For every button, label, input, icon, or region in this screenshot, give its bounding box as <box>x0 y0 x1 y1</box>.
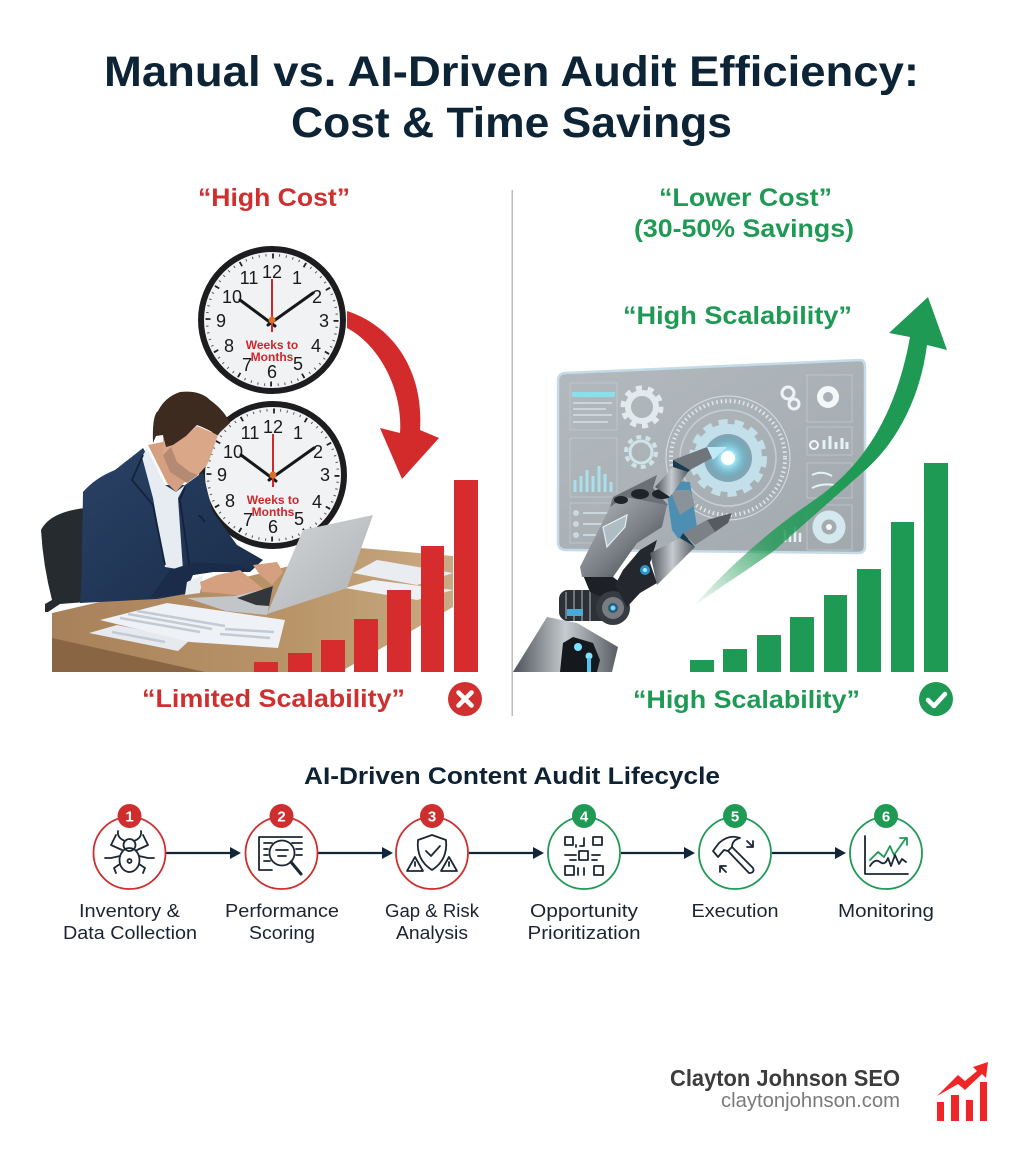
dashboard text card <box>570 383 617 430</box>
label: Scoring <box>249 923 315 943</box>
heading: lower cost: (30-50% Savings) <box>634 215 854 243</box>
step 1: inventory and data collection: 1 <box>125 808 134 826</box>
heading: high cost: “High Cost” <box>198 184 350 212</box>
suit jacket <box>80 448 263 603</box>
icon: brand logo <box>937 1062 988 1121</box>
icon: clock top: 7 <box>242 355 252 375</box>
lapels <box>132 455 205 570</box>
step 6: monitoring <box>838 804 934 921</box>
thumb finger <box>650 538 695 585</box>
dashboard bar card <box>570 438 617 497</box>
wrist <box>559 590 613 621</box>
forearm <box>513 617 618 672</box>
under palm mechanics <box>583 575 630 605</box>
forearm dark inset <box>560 637 600 672</box>
step 4: opportunity prioritization <box>528 804 640 943</box>
label: Execution <box>692 901 778 921</box>
illustration: man working on laptop <box>80 392 283 603</box>
bar chart: high scalability <box>690 463 948 672</box>
icon: document with magnifier <box>259 837 302 874</box>
neck <box>148 440 196 492</box>
label: high scalability bottom: “High Scalability” <box>633 686 860 714</box>
icon: clock bottom <box>202 404 344 546</box>
icon: clock bottom: 10 <box>223 442 243 462</box>
label <box>63 901 197 943</box>
illustration: laptop <box>187 515 373 615</box>
label: limited scalability: “Limited Scalability” <box>142 685 405 713</box>
label <box>528 901 640 943</box>
middle and ring fingers <box>610 475 668 507</box>
label: Performance <box>225 901 339 921</box>
step 1: inventory and data collection <box>63 804 197 943</box>
icon: spider <box>105 831 154 873</box>
step 2: performance scoring: 2 <box>277 808 286 826</box>
icon: clock top: Weeks to <box>246 338 298 352</box>
icon: clock top: 3 <box>319 311 329 331</box>
icon: cross badge <box>448 682 482 716</box>
icon: clock top: Months <box>251 350 294 364</box>
shirt <box>142 448 185 570</box>
illustration: robot hand <box>513 447 732 672</box>
near sleeve shade <box>150 562 250 598</box>
arrows between lifecycle steps <box>166 847 846 859</box>
hands <box>200 562 283 597</box>
dashboard central dial <box>666 396 790 520</box>
icon: clock bottom: Weeks to <box>247 493 299 507</box>
step 3: gap and risk analysis <box>385 804 480 943</box>
label: Opportunity <box>530 901 638 921</box>
label: Analysis <box>396 923 468 943</box>
icon: clock bottom: Months <box>252 505 295 519</box>
dark mechanics <box>615 540 657 607</box>
face <box>163 426 218 483</box>
icon: hammer with arrows <box>713 837 754 873</box>
dashboard gears <box>623 387 799 467</box>
icon: clock top: 5 <box>293 354 303 374</box>
illustration: desk front edge <box>52 638 205 672</box>
illustration: holographic dashboard <box>558 360 865 553</box>
label: Monitoring <box>838 901 934 921</box>
icon: clock bottom: 3 <box>320 465 330 485</box>
heading: lower cost: “Lower Cost” <box>659 184 832 212</box>
label <box>385 901 480 943</box>
shield emblem <box>603 515 627 547</box>
icon: clock top: 12 <box>262 262 282 282</box>
arrow: red curved down <box>347 311 439 479</box>
step 5: execution <box>692 804 778 921</box>
footer brand text <box>670 1065 900 1112</box>
title: Manual vs. AI-Driven Audit Efficiency: <box>104 48 919 96</box>
knuckles <box>614 489 672 504</box>
heading: lower cost <box>634 184 854 243</box>
icon: clock top: 10 <box>222 287 242 307</box>
panel: manual audit <box>41 249 478 672</box>
heading: high scalability: “High Scalability” <box>623 302 852 330</box>
hair <box>153 392 230 447</box>
label: Prioritization <box>528 923 640 943</box>
title: Cost & Time Savings <box>291 99 732 147</box>
panel: AI audit <box>513 297 948 672</box>
icon: clock top: 9 <box>216 311 226 331</box>
palm <box>580 497 667 577</box>
icon: priority grid <box>565 837 603 875</box>
icon: line chart <box>865 836 908 874</box>
icon: check badge <box>919 682 953 716</box>
icon: clock bottom: 7 <box>243 510 253 530</box>
behind fingers <box>665 480 697 545</box>
footer brand text: Clayton Johnson SEO <box>670 1065 900 1091</box>
icon: clock top: 1 <box>292 268 302 288</box>
icon: clock bottom: 2 <box>313 442 323 462</box>
icon: clock top: 6 <box>267 362 277 382</box>
icon: clock top: 4 <box>311 336 321 356</box>
cuff <box>185 575 203 595</box>
title <box>104 48 919 147</box>
icon: clock bottom: 4 <box>312 492 322 512</box>
illustration: papers on desk <box>89 560 453 651</box>
icon: clock top: 11 <box>240 268 258 288</box>
label <box>225 901 339 943</box>
step 5: execution: 5 <box>731 808 739 826</box>
heading: lifecycle: AI-Driven Content Audit Lifecycle <box>304 763 720 790</box>
illustration: office chair <box>41 508 86 612</box>
bar chart: limited scalability <box>254 480 478 672</box>
icon: clock top: 8 <box>224 336 234 356</box>
icon: clock bottom: 12 <box>263 417 283 437</box>
step 6: monitoring: 6 <box>882 808 890 826</box>
step 3: gap and risk analysis: 3 <box>428 808 436 826</box>
icon: clock bottom: 9 <box>217 465 227 485</box>
icon: clock bottom: 1 <box>293 423 303 443</box>
illustration: desk <box>52 548 453 672</box>
arrow: green growth <box>692 297 947 608</box>
label: Inventory & <box>79 901 180 921</box>
divider between manual and AI panels <box>512 190 513 716</box>
icon: clock bottom: 6 <box>268 517 278 537</box>
icon: clock bottom: 5 <box>294 509 304 529</box>
index finger <box>655 467 688 497</box>
dashboard list card <box>570 503 617 543</box>
icon: shield with warnings <box>407 835 457 871</box>
label: Gap & Risk <box>385 901 480 921</box>
icon: clock top <box>201 249 343 391</box>
dashboard right cards <box>785 375 852 550</box>
stubble <box>163 447 198 483</box>
label: Data Collection <box>63 923 197 943</box>
icon: clock bottom: 11 <box>241 423 259 443</box>
icon: clock bottom: 8 <box>225 491 235 511</box>
step 4: opportunity prioritization: 4 <box>580 808 589 826</box>
footer brand text: claytonjohnson.com <box>721 1090 900 1112</box>
step 2: performance scoring <box>225 804 339 943</box>
icon: clock top: 2 <box>312 287 322 307</box>
